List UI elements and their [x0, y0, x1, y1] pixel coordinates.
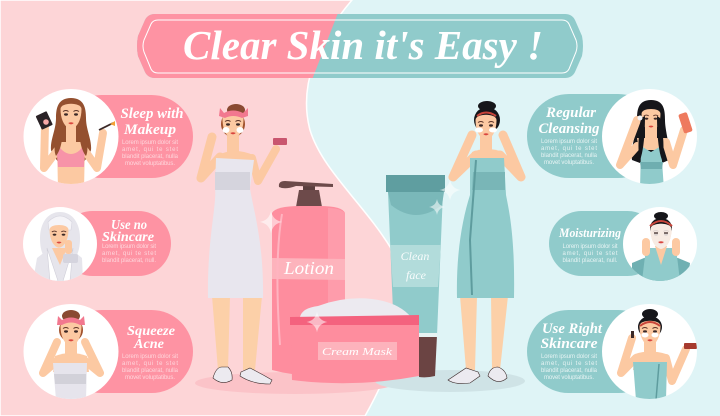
title banner — [137, 14, 583, 78]
text block: amet, qui te stet — [541, 361, 597, 367]
sparkles — [260, 180, 460, 332]
panel: Regular Cleansing — [527, 89, 697, 190]
title text: Clear Skin it's Easy ! — [183, 22, 543, 68]
panel: Use Right Skincare — [527, 304, 697, 400]
text block: amet, qui te stet — [562, 251, 618, 257]
text block: blandit placerat, null. — [102, 258, 156, 264]
icon: woman with makeup — [36, 98, 115, 190]
heading: Regular Cleansing: Regular — [545, 105, 596, 121]
text block: amet, qui te stet — [102, 251, 156, 257]
text block — [122, 140, 179, 167]
figure: woman in teal towel — [448, 101, 521, 384]
heading: Use Right Skincare — [540, 321, 603, 352]
text block: blandit placerat, nulla — [541, 368, 598, 374]
label text: Lotion: Lotion — [283, 258, 334, 278]
text block: Lorem ipsum dolor sit — [122, 354, 178, 360]
panel: Moisturizing — [549, 207, 697, 281]
icon: woman squeezing acne — [43, 310, 100, 400]
icon: woman in towel and robe — [33, 212, 83, 281]
text block: movet voluptatibus. — [125, 161, 175, 167]
product: pink cream mask jar — [290, 298, 419, 383]
text block: amet, qui te stet — [541, 146, 597, 152]
heading: Use no Skincare — [102, 218, 154, 245]
heading: Squeeze Acne: Acne — [133, 337, 164, 352]
text block — [541, 354, 598, 381]
text block: movet voluptatibus. — [544, 160, 594, 166]
icon: woman cleansing — [620, 100, 693, 190]
text block: Lorem ipsum dolor sit — [541, 139, 597, 145]
heading: Regular Cleansing: Cleansing — [538, 121, 600, 137]
label text: Clean face: face — [406, 268, 427, 282]
heading: Squeeze Acne — [127, 324, 175, 352]
shadow: right figure and products — [375, 370, 525, 392]
background: pink side — [0, 0, 403, 416]
label text: Clean face: Clean — [401, 249, 429, 263]
icon: woman applying skincare — [621, 309, 697, 400]
text block: amet, qui te stet — [122, 361, 178, 367]
panel: Squeeze Acne — [24, 304, 193, 400]
text block: blandit placerat, nulla — [122, 368, 179, 374]
panel: Sleep with Makeup — [24, 89, 193, 190]
heading: Use no Skincare: Skincare — [102, 230, 154, 245]
heading: Use Right Skincare: Use Right — [542, 321, 603, 337]
heading: Squeeze Acne: Squeeze — [127, 324, 175, 339]
heading: Regular Cleansing — [538, 105, 600, 137]
heading: Use no Skincare: Use no — [111, 218, 147, 233]
text block: movet voluptatibus. — [125, 375, 175, 381]
heading: Sleep with Makeup: Makeup — [123, 122, 177, 138]
heading: Use Right Skincare: Skincare — [540, 336, 598, 352]
text block: movet voluptatibus. — [544, 375, 594, 381]
text block: blandit placerat, nulla — [541, 153, 598, 159]
text block — [562, 244, 618, 264]
product: teal tube — [386, 175, 445, 377]
shadow: left figure and products — [195, 372, 395, 394]
text block: Lorem ipsum dolor sit — [541, 354, 597, 360]
label text: Cream Mask: Cream Mask — [322, 346, 393, 358]
text block: blandit placerat, null. — [562, 258, 618, 264]
text block: Lorem ipsum dolor sit — [102, 244, 156, 250]
text block — [102, 244, 156, 264]
heading: Moisturizing: Moisturizing — [558, 225, 621, 240]
figure: woman in white towel — [201, 104, 287, 384]
product: pink lotion bottle — [272, 181, 345, 376]
heading: Sleep with Makeup — [120, 106, 184, 138]
text block — [122, 354, 179, 381]
heading: Sleep with Makeup: Sleep with — [120, 106, 184, 122]
text block: Lorem ipsum dolor sit — [562, 244, 618, 250]
text block — [541, 139, 598, 166]
icon: woman with face mask — [632, 212, 690, 281]
text block: blandit placerat, nulla — [122, 154, 179, 160]
text block: Lorem ipsum dolor sit — [122, 140, 178, 146]
text block: amet, qui te stet — [122, 147, 178, 153]
panel: Use no Skincare — [23, 207, 171, 281]
